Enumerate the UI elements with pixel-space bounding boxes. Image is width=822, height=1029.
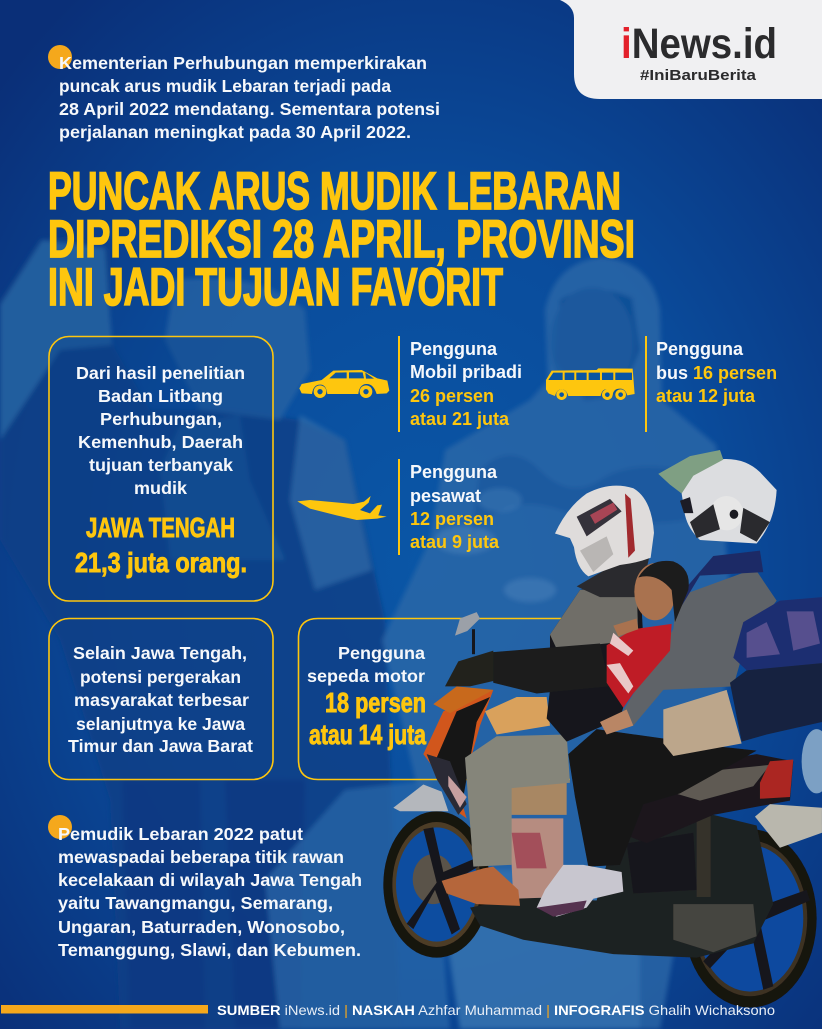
panel: destination: Dari hasil penelitian [76, 363, 245, 383]
logo wordmark: iNews.id [621, 20, 777, 68]
logo tagline: #IniBaruBerita [640, 67, 757, 84]
panel: motorcycle users: sepeda motor [307, 666, 425, 686]
panel: destination: mudik [134, 478, 187, 498]
text: plane users: atau 9 juta [410, 532, 500, 552]
woman trousers [568, 729, 757, 867]
front wheel [383, 811, 490, 958]
panel: destination: Badan Litbang [98, 386, 223, 406]
divider: car [398, 336, 400, 432]
panel: destination: 21,3 juta orang. [75, 547, 247, 578]
text: plane users [410, 462, 500, 552]
license plate [755, 804, 822, 848]
panel: motorcycle users: atau 14 juta [309, 719, 426, 750]
driver torso [547, 576, 643, 742]
footer credits: SUMBER iNews.id | NASKAH Azhfar Muhammad | INFOGRAFIS Ghalih Wichaksono [217, 1002, 775, 1018]
panel: other destinations: potensi pergerakan [80, 667, 241, 687]
icon: airplane [297, 496, 387, 520]
text: car users [410, 339, 522, 429]
intro text [59, 53, 440, 142]
text: plane users: 12 persen [410, 509, 494, 529]
closing text: Ungaran, Baturraden, Wonosobo, [58, 917, 345, 937]
sandal [537, 865, 623, 917]
panel: motorcycle users [298, 618, 570, 780]
closing text: Temanggung, Slawi, dan Kebumen. [58, 940, 361, 960]
panel: destination [49, 336, 273, 601]
luggage [730, 597, 822, 742]
tail light [760, 760, 793, 799]
panel: other destinations: selanjutnya ke Jawa [76, 714, 245, 734]
panel: other destinations: Timur dan Jawa Barat [68, 736, 253, 756]
rear body [613, 754, 793, 843]
driver shoe [442, 867, 520, 906]
text: bus users: atau 12 juta [656, 386, 756, 406]
text: car users: Pengguna [410, 339, 498, 359]
title: INI JADI TUJUAN FAVORIT [48, 258, 503, 317]
closing text: kecelakaan di wilayah Jawa Tengah [58, 870, 362, 890]
divider: bus [645, 336, 647, 432]
panel: motorcycle users: Pengguna [338, 643, 425, 663]
driver helmet [555, 486, 654, 576]
panel: other destinations: masyarakat terbesar [74, 690, 249, 710]
panel: destination: Perhubungan, [100, 409, 222, 429]
panel: motorcycle users: 18 persen [325, 687, 426, 718]
woman helmet [658, 450, 777, 544]
child [607, 561, 689, 708]
footer bar [1, 1005, 208, 1014]
text: car users: Mobil pribadi [410, 362, 522, 382]
closing text: mewaspadai beberapa titik rawan [58, 847, 344, 867]
mirror [455, 612, 480, 654]
cartons [507, 783, 567, 815]
intro text: perjalanan meningkat pada 30 April 2022. [59, 122, 411, 142]
text: car users: atau 21 juta [410, 409, 510, 429]
text: bus users [656, 339, 777, 406]
panel: destination: tujuan terbanyak [89, 455, 233, 475]
background ghost photo of travellers [0, 235, 735, 1029]
motorcycle family photo [383, 450, 822, 1008]
divider: plane [398, 459, 400, 555]
package on footboard [485, 697, 550, 735]
intro text: puncak arus mudik Lebaran terjadi pada [59, 76, 391, 96]
closing bullet [48, 815, 72, 839]
text: car users: 26 persen [410, 386, 494, 406]
intro text: Kementerian Perhubungan memperkirakan [59, 53, 427, 73]
text: plane users: pesawat [410, 486, 481, 506]
logo panel [560, 0, 822, 99]
closing text: yaitu Tawangmangu, Semarang, [58, 893, 333, 913]
front fairing [423, 690, 493, 818]
rear wheel [683, 829, 817, 1008]
closing text: Pemudik Lebaran 2022 patut [58, 824, 303, 844]
panel: other destinations: Selain Jawa Tengah, [73, 643, 247, 663]
title [48, 162, 635, 317]
text: plane users: Pengguna [410, 462, 498, 482]
panel: destination: JAWA TENGAH [86, 512, 235, 543]
text: bus users: bus 16 persen [656, 363, 777, 383]
woman jacket [622, 569, 777, 726]
intro bullet [48, 45, 72, 69]
panel: other destinations [49, 618, 273, 780]
icon: car [299, 370, 389, 398]
driver arm and glove [490, 643, 610, 693]
woman bag [663, 690, 742, 756]
woman scarf [675, 551, 763, 611]
bottle [802, 729, 822, 793]
driver scarf [577, 554, 650, 597]
engine and underframe [470, 815, 773, 958]
intro text: 28 April 2022 mendatang. Sementara potensi [59, 99, 440, 119]
panel: destination: Kemenhub, Daerah [78, 432, 243, 452]
driver legs [465, 735, 570, 867]
text: bus users: Pengguna [656, 339, 744, 359]
closing text [58, 824, 362, 960]
icon: bus [546, 368, 635, 400]
